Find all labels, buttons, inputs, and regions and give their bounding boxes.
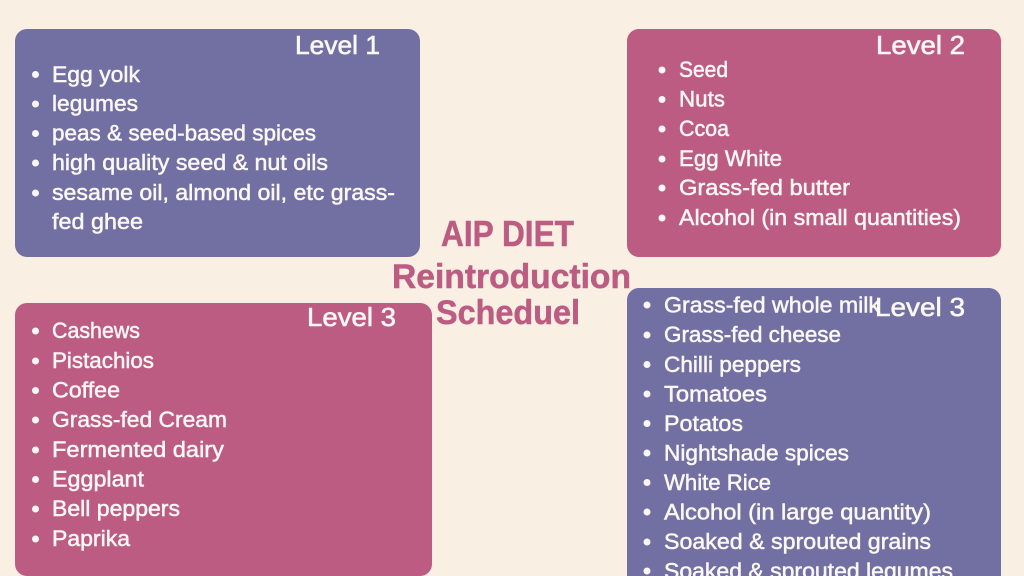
list: level 2 foods: [658, 57, 961, 230]
list: level 3 right foods: Chilli peppers: [664, 352, 801, 377]
list: level 1 foods: [32, 62, 395, 234]
title: Scheduel: [436, 294, 580, 332]
list: level 3 right foods: [644, 292, 953, 576]
list: level 3 left foods: Cashews: [52, 318, 140, 343]
list: level 2 foods: Seed: [679, 57, 728, 82]
panel: level 3 right: [627, 288, 1001, 576]
list: level 3 left foods: Paprika: [52, 526, 130, 551]
list: level 3 right foods: Soaked & sprouted grains: [664, 529, 931, 554]
heading: level 3 left: Level 3: [307, 302, 396, 332]
list: level 2 foods: Ccoa: [679, 116, 729, 141]
list: level 3 right foods: Grass-fed cheese: [664, 322, 841, 347]
heading: level 1: Level 1: [295, 30, 380, 60]
list: level 1 foods: Egg yolk: [52, 62, 141, 87]
list: level 3 left foods: Pistachios: [52, 348, 154, 373]
list: level 3 right foods: Nightshade spices: [664, 440, 849, 466]
list: level 3 left foods: Grass-fed Cream: [52, 407, 227, 432]
list: level 2 foods: Nuts: [679, 86, 725, 112]
list: level 3 right foods: Alcohol (in large quantity): [664, 500, 931, 524]
title: AIP DIET: [441, 213, 574, 254]
title: Reintroduction: [392, 258, 631, 296]
panel: level 2: [627, 29, 1001, 257]
panel: level 3 left: [15, 302, 432, 576]
list: level 3 left foods: Bell peppers: [52, 496, 180, 521]
list: level 2 foods: Alcohol (in small quantities): [679, 205, 961, 230]
list: level 1 foods: fed ghee: [52, 209, 143, 234]
list: level 3 right foods: Grass-fed whole milk: [664, 292, 881, 318]
list: level 3 left foods: Eggplant: [52, 466, 145, 492]
list: level 3 left foods: [32, 318, 227, 551]
list: level 3 right foods: White Rice: [664, 470, 771, 495]
list: level 1 foods: sesame oil, almond oil, etc grass-: [52, 180, 395, 205]
list: level 2 foods: Grass-fed butter: [679, 175, 851, 200]
panel: level 1: [15, 29, 420, 257]
heading: level 3 right: Level 3: [875, 292, 965, 322]
list: level 3 left foods: Fermented dairy: [52, 437, 225, 462]
heading: level 2: Level 2: [876, 30, 965, 60]
title: [392, 213, 631, 332]
list: level 1 foods: peas & seed-based spices: [52, 120, 316, 146]
list: level 3 right foods: Tomatoes: [664, 382, 767, 406]
list: level 3 left foods: Coffee: [52, 378, 120, 402]
list: level 1 foods: high quality seed & nut oils: [52, 150, 328, 175]
list: level 1 foods: legumes: [52, 91, 138, 116]
list: level 3 right foods: Potatos: [664, 411, 743, 436]
list: level 2 foods: Egg White: [679, 146, 782, 171]
